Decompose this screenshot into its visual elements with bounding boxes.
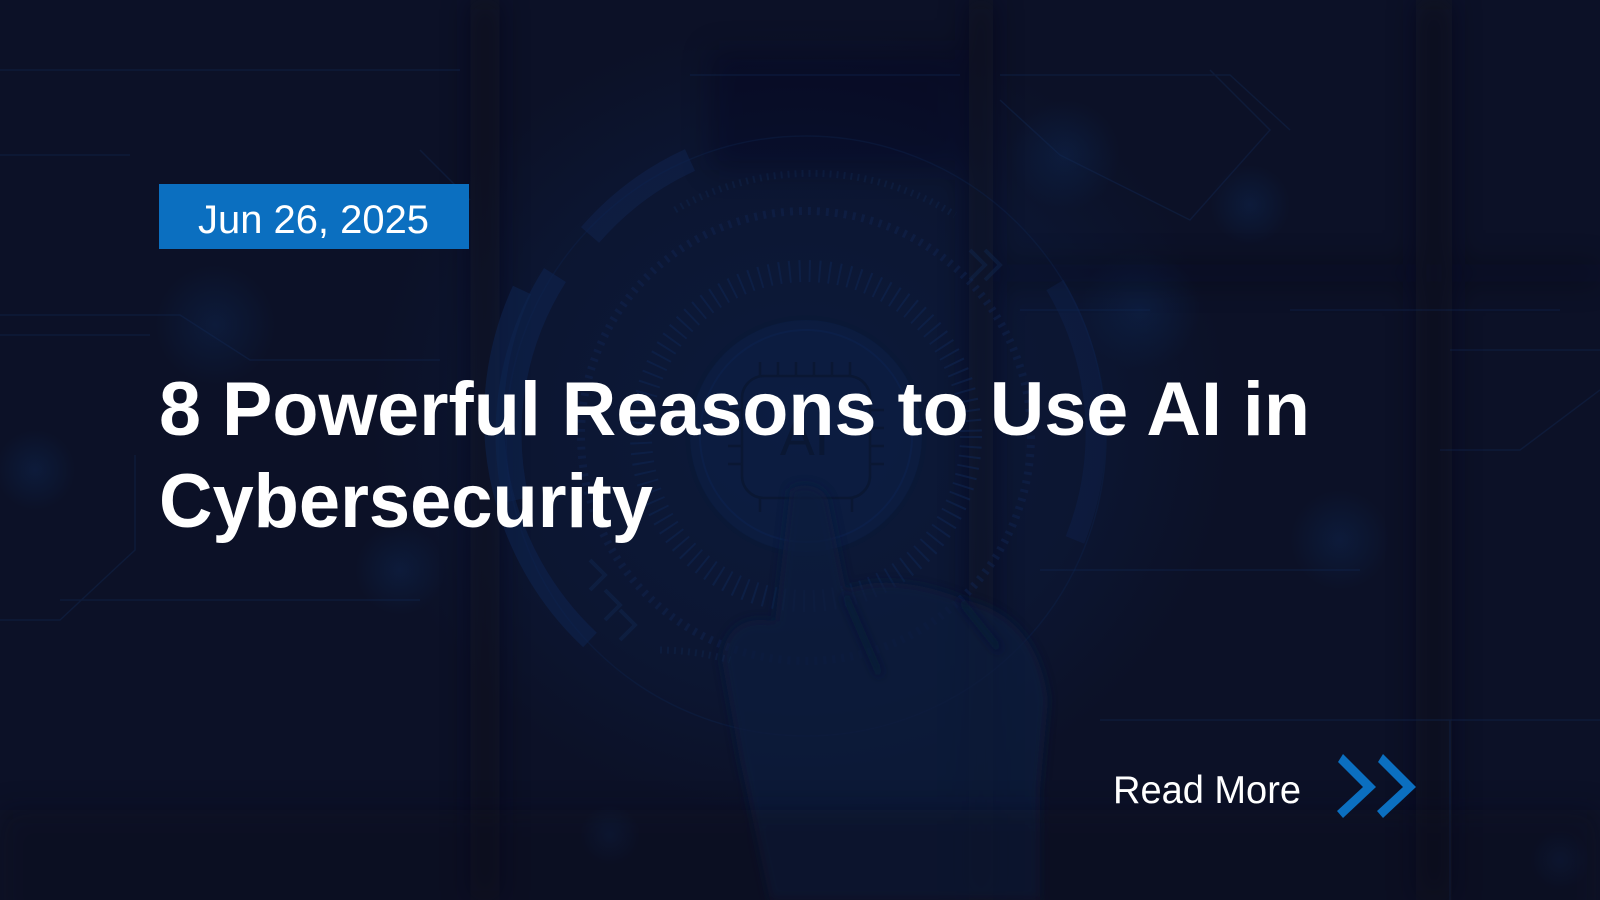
background: hand pointing at chip	[722, 485, 1048, 900]
icon: AI chip in background: AI	[780, 409, 829, 467]
badge background	[159, 184, 469, 249]
title: Cybersecurity	[159, 459, 653, 544]
date text: Jun 26, 2025	[198, 198, 429, 242]
icon: double chevron arrow	[1337, 754, 1416, 818]
title: 8 Powerful Reasons to Use AI in	[159, 367, 1310, 452]
read more text: Read More	[1113, 769, 1301, 812]
icon: AI chip in background	[728, 362, 884, 512]
